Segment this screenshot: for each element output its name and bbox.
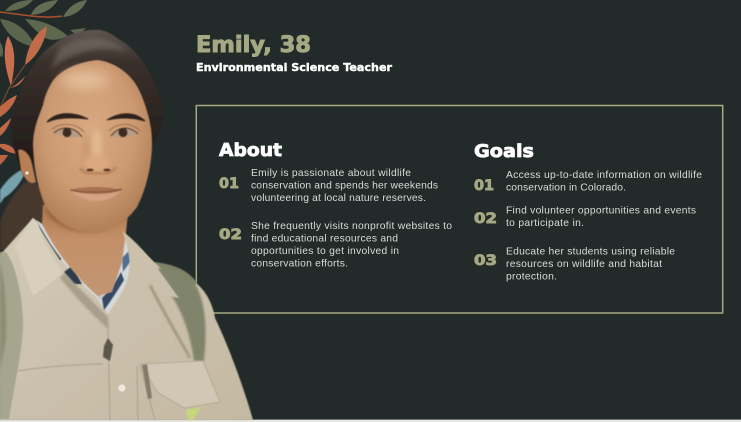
goals item 02: to participate in. [506,218,584,229]
goals item 02 [474,206,696,229]
ear and earring [18,149,36,183]
mouth [70,187,122,201]
shirt pocket [141,361,220,408]
heading: about: About [219,140,282,161]
back hair curls [0,180,48,250]
strap overlap on shoulder [152,268,206,361]
about item 01 [219,168,438,204]
right eyebrow [107,114,145,121]
placket and seams [17,330,155,420]
goals item 03: protection. [506,272,557,282]
about item 02 [219,221,452,270]
goals item 02: 02 [474,211,497,227]
shirt button [118,384,126,392]
goals item 03 [474,246,675,282]
hair [11,30,163,176]
bottom light strip [0,420,741,422]
about item 01: 01 [219,176,239,192]
botanical leaves background [0,0,87,204]
goals item 01: 01 [474,178,494,194]
about item 02: opportunities to get involved in [251,246,399,257]
goals item 02: Find volunteer opportunities and events [506,206,696,216]
hair highlight [50,38,128,70]
goals item 01: Access up-to-date information on wildlife [506,170,702,181]
heading: goals: Goals [474,141,534,162]
goals item 03: 03 [474,253,497,269]
forehead highlight [61,71,109,89]
left collar [15,218,64,296]
left eyebrow [47,114,88,122]
about item 02: find educational resources and [251,234,398,244]
green accent [186,407,201,420]
subtitle: Environmental Science Teacher [196,61,393,74]
title: Emily, 38 [196,33,311,58]
right collar [110,231,179,316]
about item 01: conservation and spends her weekends [251,180,438,192]
goals item 03: resources on wildlife and habitat [506,259,662,270]
goals item 01 [474,170,702,194]
face [33,60,152,233]
panel: about and goals [196,106,723,313]
about item 01: Emily is passionate about wildlife [251,168,411,179]
left eye [52,124,84,137]
about item 01: volunteering at local nature reserves. [251,193,426,204]
left backpack strap [0,252,23,419]
right backpack strap [150,262,207,362]
goals item 03: Educate her students using reliable [506,246,675,258]
right eye [109,124,140,137]
shirt body [0,218,253,420]
neck [42,195,130,296]
about item 02: 02 [219,227,242,243]
glasses hanging on placket [103,338,113,361]
nose [80,129,116,173]
portrait illustration [0,30,253,420]
about item 02: She frequently visits nonprofit websites to [251,221,452,232]
goals item 01: conservation in Colorado. [506,182,626,194]
plaid scarf [36,220,130,314]
about item 02: conservation efforts. [251,258,348,270]
pen in pocket [142,364,152,399]
